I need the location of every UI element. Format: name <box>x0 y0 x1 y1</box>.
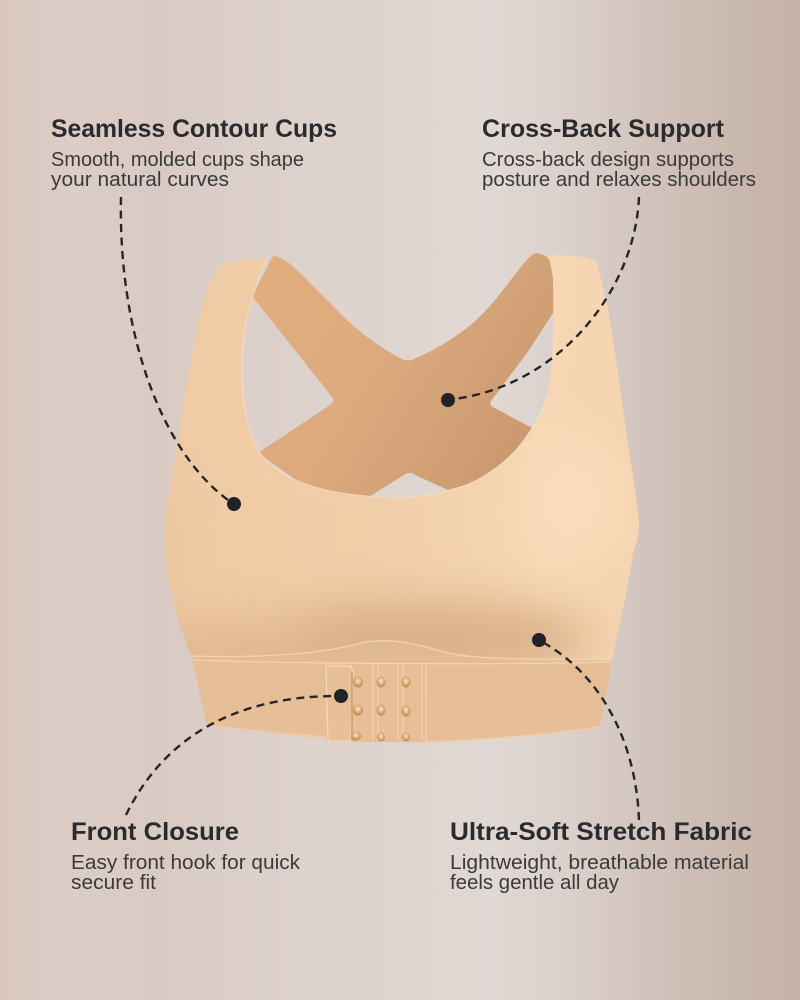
heading: Front Closure <box>71 818 239 846</box>
description: Cross-back design supports <box>482 149 734 171</box>
marker dot <box>532 633 546 647</box>
fabric shading <box>177 477 612 742</box>
band seam lines <box>192 641 612 659</box>
neckline edge <box>242 258 547 498</box>
metal hooks <box>351 676 410 742</box>
heading: Cross-Back Support <box>482 115 725 143</box>
callout: seamless contour cups <box>51 115 337 511</box>
callout: ultra-soft stretch fabric <box>450 633 752 894</box>
description: posture and relaxes shoulders <box>482 169 756 191</box>
description: your natural curves <box>51 169 229 191</box>
description: secure fit <box>71 872 156 894</box>
marker dot <box>334 689 348 703</box>
under-bust band <box>580 660 612 663</box>
description: Smooth, molded cups shape <box>51 149 304 171</box>
leader line <box>126 696 335 815</box>
back crossed straps <box>252 253 555 498</box>
leader line <box>121 197 228 500</box>
bra front body <box>165 255 639 742</box>
callout: front closure <box>71 689 348 894</box>
description: Easy front hook for quick <box>71 852 301 874</box>
callout: cross-back support <box>441 115 756 407</box>
leader line <box>544 643 639 820</box>
description: feels gentle all day <box>450 872 619 894</box>
leader line <box>454 197 639 399</box>
heading: Seamless Contour Cups <box>51 115 337 143</box>
bottom band edge <box>207 725 600 742</box>
marker dot <box>227 497 241 511</box>
heading: Ultra-Soft Stretch Fabric <box>450 818 752 846</box>
front hook closure <box>326 664 426 742</box>
neckline stitching <box>228 300 566 505</box>
description: Lightweight, breathable material <box>450 852 749 874</box>
marker dot <box>441 393 455 407</box>
product: bra <box>140 253 639 745</box>
